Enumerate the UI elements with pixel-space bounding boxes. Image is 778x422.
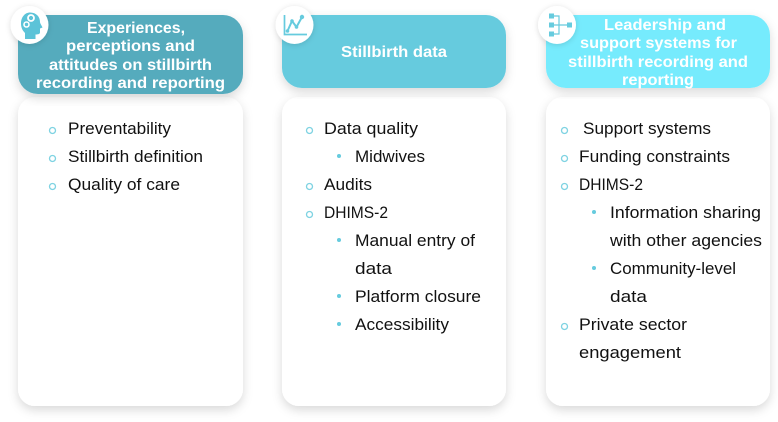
list: leadership topics: Support systems <box>583 119 711 138</box>
panel body: stillbirth data list background <box>282 97 506 406</box>
heading: stillbirth data: Stillbirth data <box>341 44 447 61</box>
list: leadership topics <box>562 119 762 362</box>
list: stillbirth data topics: Data quality <box>324 119 419 138</box>
panel: stillbirth data <box>276 6 506 406</box>
heading: stillbirth data <box>282 15 506 88</box>
list: stillbirth data topics: Midwives <box>355 147 425 166</box>
list: stillbirth data topics: data <box>355 259 393 278</box>
icon: head with gears <box>10 6 48 44</box>
heading: experiences, perceptions and attitudes: perceptions and <box>66 38 195 55</box>
panel: leadership and support systems <box>538 6 770 406</box>
heading: leadership and support systems: support systems for <box>580 35 737 52</box>
list: leadership topics: Funding constraints <box>579 147 730 166</box>
list: experiences topics: Quality of care <box>68 175 180 194</box>
list: stillbirth data topics: Accessibility <box>355 315 449 334</box>
list: stillbirth data topics: Platform closure <box>355 287 481 306</box>
list: experiences topics: Preventability <box>68 119 171 138</box>
heading: leadership and support systems: Leadership and <box>604 17 726 34</box>
list: experiences topics <box>50 119 203 194</box>
heading: leadership and support systems <box>546 15 770 89</box>
list: leadership topics: engagement <box>579 343 681 362</box>
list: leadership topics: DHIMS-2 <box>579 175 643 194</box>
heading: experiences, perceptions and attitudes: recording and reporting <box>36 75 225 92</box>
panel body: experiences list background <box>18 97 243 406</box>
panel: experiences, perceptions and attitudes <box>10 6 243 406</box>
heading: experiences, perceptions and attitudes: Experiences, <box>87 20 185 37</box>
list: leadership topics: Private sector <box>579 315 687 334</box>
list: stillbirth data topics <box>306 119 481 334</box>
heading: experiences, perceptions and attitudes: attitudes on stillbirth <box>49 57 212 74</box>
list: experiences topics: Stillbirth definition <box>68 147 203 166</box>
heading: leadership and support systems: reporting <box>622 72 694 89</box>
list: stillbirth data topics: Audits <box>324 175 372 194</box>
list: stillbirth data topics: DHIMS-2 <box>324 203 388 222</box>
list: stillbirth data topics: Manual entry of <box>355 231 475 250</box>
panel body: leadership list background <box>546 97 770 406</box>
heading: leadership and support systems: stillbirth recording and <box>568 54 748 71</box>
list: leadership topics: Information sharing <box>610 203 761 222</box>
list: leadership topics: data <box>610 287 648 306</box>
icon: line chart <box>276 6 314 44</box>
icon: hierarchy diagram <box>538 6 576 44</box>
heading: experiences, perceptions and attitudes <box>18 15 243 94</box>
list: leadership topics: with other agencies <box>609 231 762 250</box>
list: leadership topics: Community-level <box>610 259 736 278</box>
